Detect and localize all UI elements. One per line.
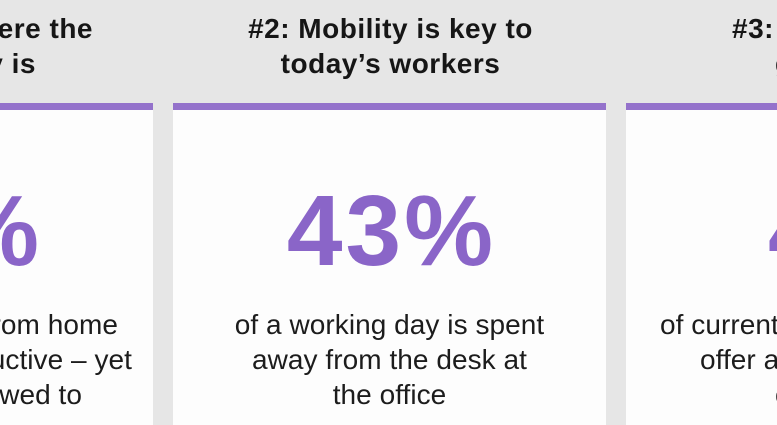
middle body text xyxy=(235,309,544,410)
right column text, cropped by the frame: offer a xyxy=(700,344,777,375)
panel: middle card xyxy=(173,103,606,425)
heading: middle column: today’s workers xyxy=(281,48,500,79)
left column text, cropped by the frame xyxy=(0,13,132,410)
middle body text: away from the desk at xyxy=(252,344,527,375)
statistic: 43%: 43% xyxy=(287,175,496,287)
right column text, cropped by the frame xyxy=(660,13,777,410)
middle body text: the office xyxy=(333,379,446,410)
panel: left card xyxy=(0,103,153,425)
middle body text: of a working day is spent xyxy=(235,309,544,340)
heading: middle column xyxy=(248,13,533,79)
panel: right card xyxy=(626,103,777,425)
heading: middle column: #2: Mobility is key to xyxy=(248,13,533,44)
